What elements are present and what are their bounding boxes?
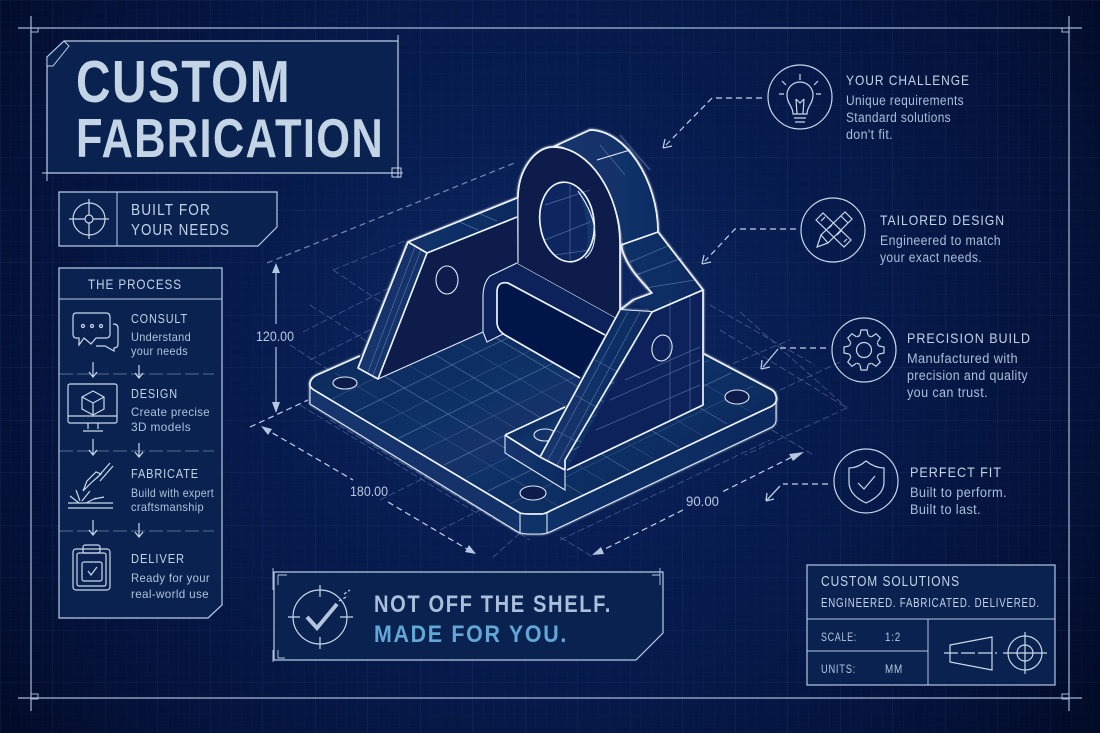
step: fabricate: Build with expert (131, 486, 214, 500)
leader arrow: perfect fit (766, 484, 828, 501)
icon: crosshair (69, 199, 109, 239)
title block: UNITS: (821, 662, 856, 676)
icon: gear (832, 318, 896, 382)
title block: ENGINEERED. FABRICATED. DELIVERED. (821, 596, 1040, 610)
step: consult: your needs (131, 344, 188, 358)
step: fabricate: craftsmanship (131, 500, 204, 514)
step: fabricate: FABRICATE (131, 466, 199, 481)
callout: your challenge: Unique requirements (846, 93, 964, 108)
callout: perfect fit: Built to last. (910, 502, 981, 517)
banner: not off the shelf: NOT OFF THE SHELF. (374, 591, 612, 618)
dimension: 90.00: 90.00 (686, 493, 719, 509)
callout: your challenge: YOUR CHALLENGE (846, 72, 970, 88)
icon: welding torch (68, 463, 113, 508)
dimension: 120.00: 120.00 (256, 328, 294, 344)
title block: CUSTOM SOLUTIONS (821, 574, 960, 590)
step: design: Create precise (131, 405, 210, 419)
step: design: DESIGN (131, 386, 178, 401)
step: consult: Understand (131, 330, 191, 344)
callout: perfect fit (834, 449, 1007, 517)
callout: precision build (832, 318, 1031, 400)
title block: 1:2 (885, 630, 901, 644)
icon: clipboard (73, 545, 110, 590)
left gusset (358, 198, 517, 379)
icon: target check (288, 585, 353, 649)
built for your needs panel (59, 192, 277, 246)
icon: pencil and ruler (801, 198, 865, 262)
lug with bore (517, 130, 703, 320)
arrows: consult to design (89, 362, 143, 378)
title block: MM (885, 662, 903, 676)
callout: your challenge (768, 65, 970, 142)
callout: your challenge: don't fit. (846, 127, 893, 142)
icon: light bulb (768, 65, 832, 129)
title panel: CUSTOM (76, 49, 291, 115)
callout: tailored design: your exact needs. (880, 250, 982, 265)
banner: not off the shelf (273, 568, 663, 662)
callout: perfect fit: PERFECT FIT (910, 464, 1002, 480)
base plate (310, 262, 776, 534)
callout: tailored design: TAILORED DESIGN (880, 212, 1005, 228)
dimension: 90.00 (592, 452, 804, 555)
title panel: FABRICATION (76, 107, 384, 169)
step: deliver: real-world use (131, 587, 209, 601)
step: consult (73, 311, 191, 358)
isometric bracket (310, 130, 776, 534)
leader arrow: tailored design (702, 229, 796, 264)
built for your needs panel: BUILT FOR (131, 202, 211, 219)
leader arrow: precision build (761, 348, 826, 369)
mounting holes (333, 377, 749, 500)
panel: the process (59, 268, 222, 618)
floor projection grid (290, 240, 847, 560)
step: fabricate (68, 463, 214, 514)
dimension: 120.00 (250, 162, 517, 427)
callout: your challenge: Standard solutions (846, 110, 951, 125)
icon: monitor with cube (68, 384, 117, 431)
title panel (42, 35, 403, 181)
callout: perfect fit: Built to perform. (910, 485, 1007, 500)
step: consult: CONSULT (131, 311, 188, 326)
icon: chat bubbles (73, 313, 118, 351)
built for your needs panel: YOUR NEEDS (131, 222, 230, 239)
banner: not off the shelf: MADE FOR YOU. (374, 621, 568, 648)
icon: projection symbol (944, 632, 1047, 674)
dimension: 180.00 (261, 426, 476, 554)
step: design: 3D models (131, 420, 191, 434)
callout: tailored design (801, 198, 1005, 265)
callout: precision build: precision and quality (907, 368, 1028, 383)
icon: shield with check (834, 449, 898, 513)
panel: the process: THE PROCESS (88, 276, 182, 292)
rear wall and window (378, 217, 620, 379)
callout: precision build: PRECISION BUILD (907, 330, 1031, 346)
step: deliver: DELIVER (131, 551, 185, 566)
callout: precision build: you can trust. (907, 385, 988, 400)
step: design (68, 384, 210, 434)
title block: SCALE: (821, 630, 857, 644)
callout: precision build: Manufactured with (907, 351, 1018, 366)
leader arrow: your challenge (663, 98, 762, 148)
right gusset and foot (505, 290, 703, 490)
arrows: fabricate to deliver (89, 520, 143, 537)
dimension: 180.00: 180.00 (350, 483, 388, 499)
step: deliver (73, 545, 210, 601)
callout: tailored design: Engineered to match (880, 233, 1001, 248)
step: deliver: Ready for your (131, 571, 210, 585)
arrows: design to fabricate (89, 439, 143, 457)
title block (807, 565, 1055, 685)
